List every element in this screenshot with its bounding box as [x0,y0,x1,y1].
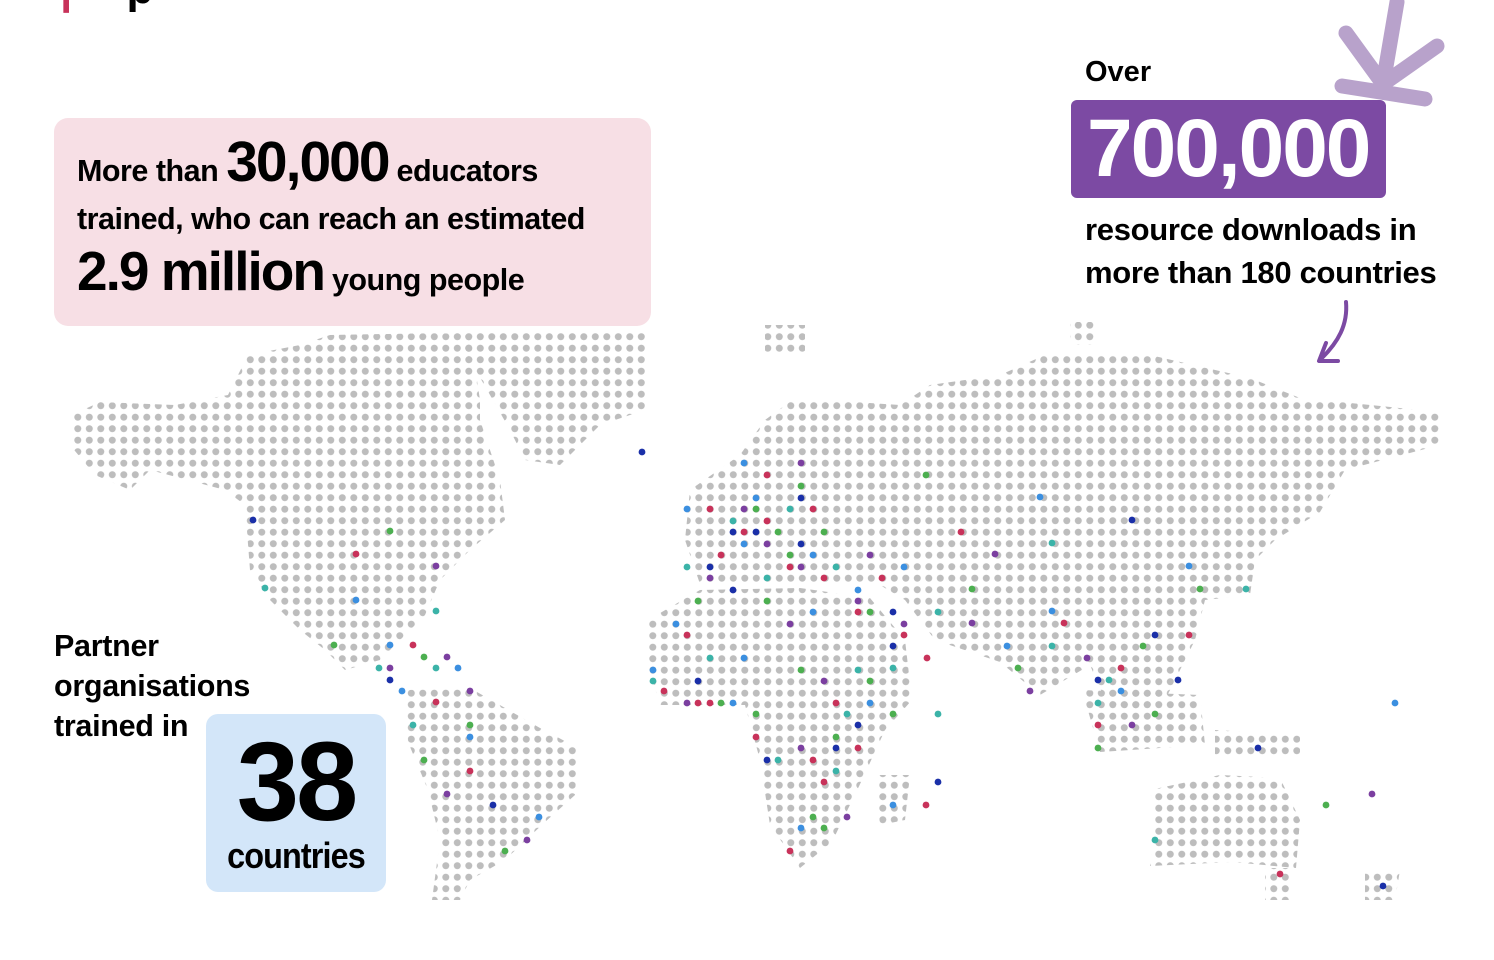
title (cropped) [60,0,154,13]
text: downloads description: resource downloads in [1085,212,1416,247]
text: partner organisations: Partner [54,629,159,663]
text: educators trained: 2.9 million young people [77,240,524,302]
text: downloads description: more than 180 countries [1085,255,1436,290]
panel: 38 countries [206,714,386,892]
text: over: Over [1085,56,1151,88]
north america [70,322,1440,900]
eurasia [685,355,1440,712]
se asia islands [1082,690,1205,752]
australia [1150,775,1300,868]
text: partner organisations [54,629,250,743]
text: educators trained: More than 30,000 educators [77,130,538,194]
partner country dots [250,449,1398,889]
panel: 38 countries: countries [227,835,365,876]
panel: 38 countries: 38 [237,719,355,844]
text: partner organisations: trained in [54,709,188,743]
south america [405,688,578,900]
panel: educators stat [54,118,651,326]
text: downloads description [1085,212,1436,290]
panel: downloads number: 700,000 [1087,103,1369,194]
icon: starburst arrow [1342,2,1437,99]
arrow: curved pointer to map [1319,302,1346,361]
text: educators trained [77,130,585,302]
text: educators trained: trained, who can reach an estimated [77,202,585,236]
greenland [455,333,645,465]
africa [648,588,912,868]
text: partner organisations: organisations [54,669,250,703]
